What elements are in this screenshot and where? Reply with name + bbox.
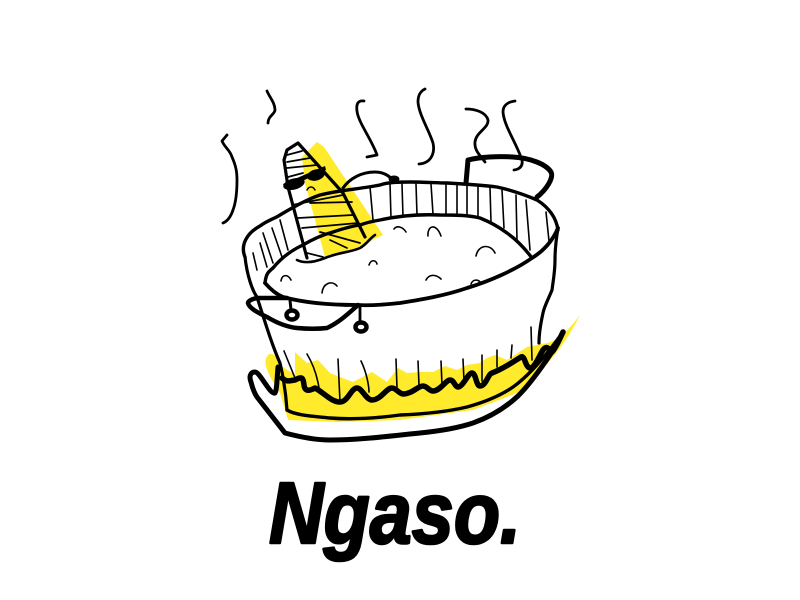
group: leaf with sunglasses — [282, 143, 375, 262]
rim inner back edge — [265, 215, 532, 283]
flame wavy line — [282, 332, 563, 402]
leaf outline — [284, 143, 365, 258]
rim front edge — [265, 228, 558, 305]
left rivet stem — [290, 300, 291, 310]
group: steam — [222, 89, 522, 223]
yellow highlight behind leaf — [302, 142, 383, 257]
group: rim hatching — [253, 184, 549, 270]
yellow highlight under pot — [265, 315, 580, 422]
steam wisp 5 — [466, 109, 488, 162]
steam wisp 1 — [222, 135, 237, 223]
right lens — [306, 167, 326, 183]
burner outline — [250, 352, 552, 440]
steam wisp 3 — [357, 101, 377, 157]
steam wisp 4 — [418, 89, 434, 164]
leaf hatching — [287, 151, 360, 257]
hatching lines of rim — [253, 184, 549, 270]
left rivet ring — [286, 310, 298, 320]
right rivet stem — [359, 306, 361, 322]
soup bubbles — [281, 227, 495, 293]
title: Ngaso. — [269, 465, 521, 562]
pot bottom edge — [287, 332, 563, 419]
pot rim outer — [243, 182, 558, 257]
smile — [307, 187, 315, 190]
back handle — [466, 157, 552, 197]
leaf bottom wave — [297, 235, 375, 262]
steam wisp 6 — [503, 101, 522, 170]
group: front handle — [248, 298, 366, 332]
pot right wall — [539, 228, 558, 343]
bubble arcs — [281, 227, 495, 293]
pot left wall — [245, 257, 287, 410]
sunglasses — [282, 166, 326, 192]
right rivet ring — [356, 322, 366, 332]
left lens — [282, 176, 306, 192]
bridge — [283, 166, 326, 189]
lid knob — [388, 176, 400, 182]
handle loop — [248, 298, 358, 329]
lid hump behind rim — [343, 172, 393, 188]
steam wisp 2 — [267, 91, 275, 123]
bottom hatching lines — [284, 327, 532, 402]
